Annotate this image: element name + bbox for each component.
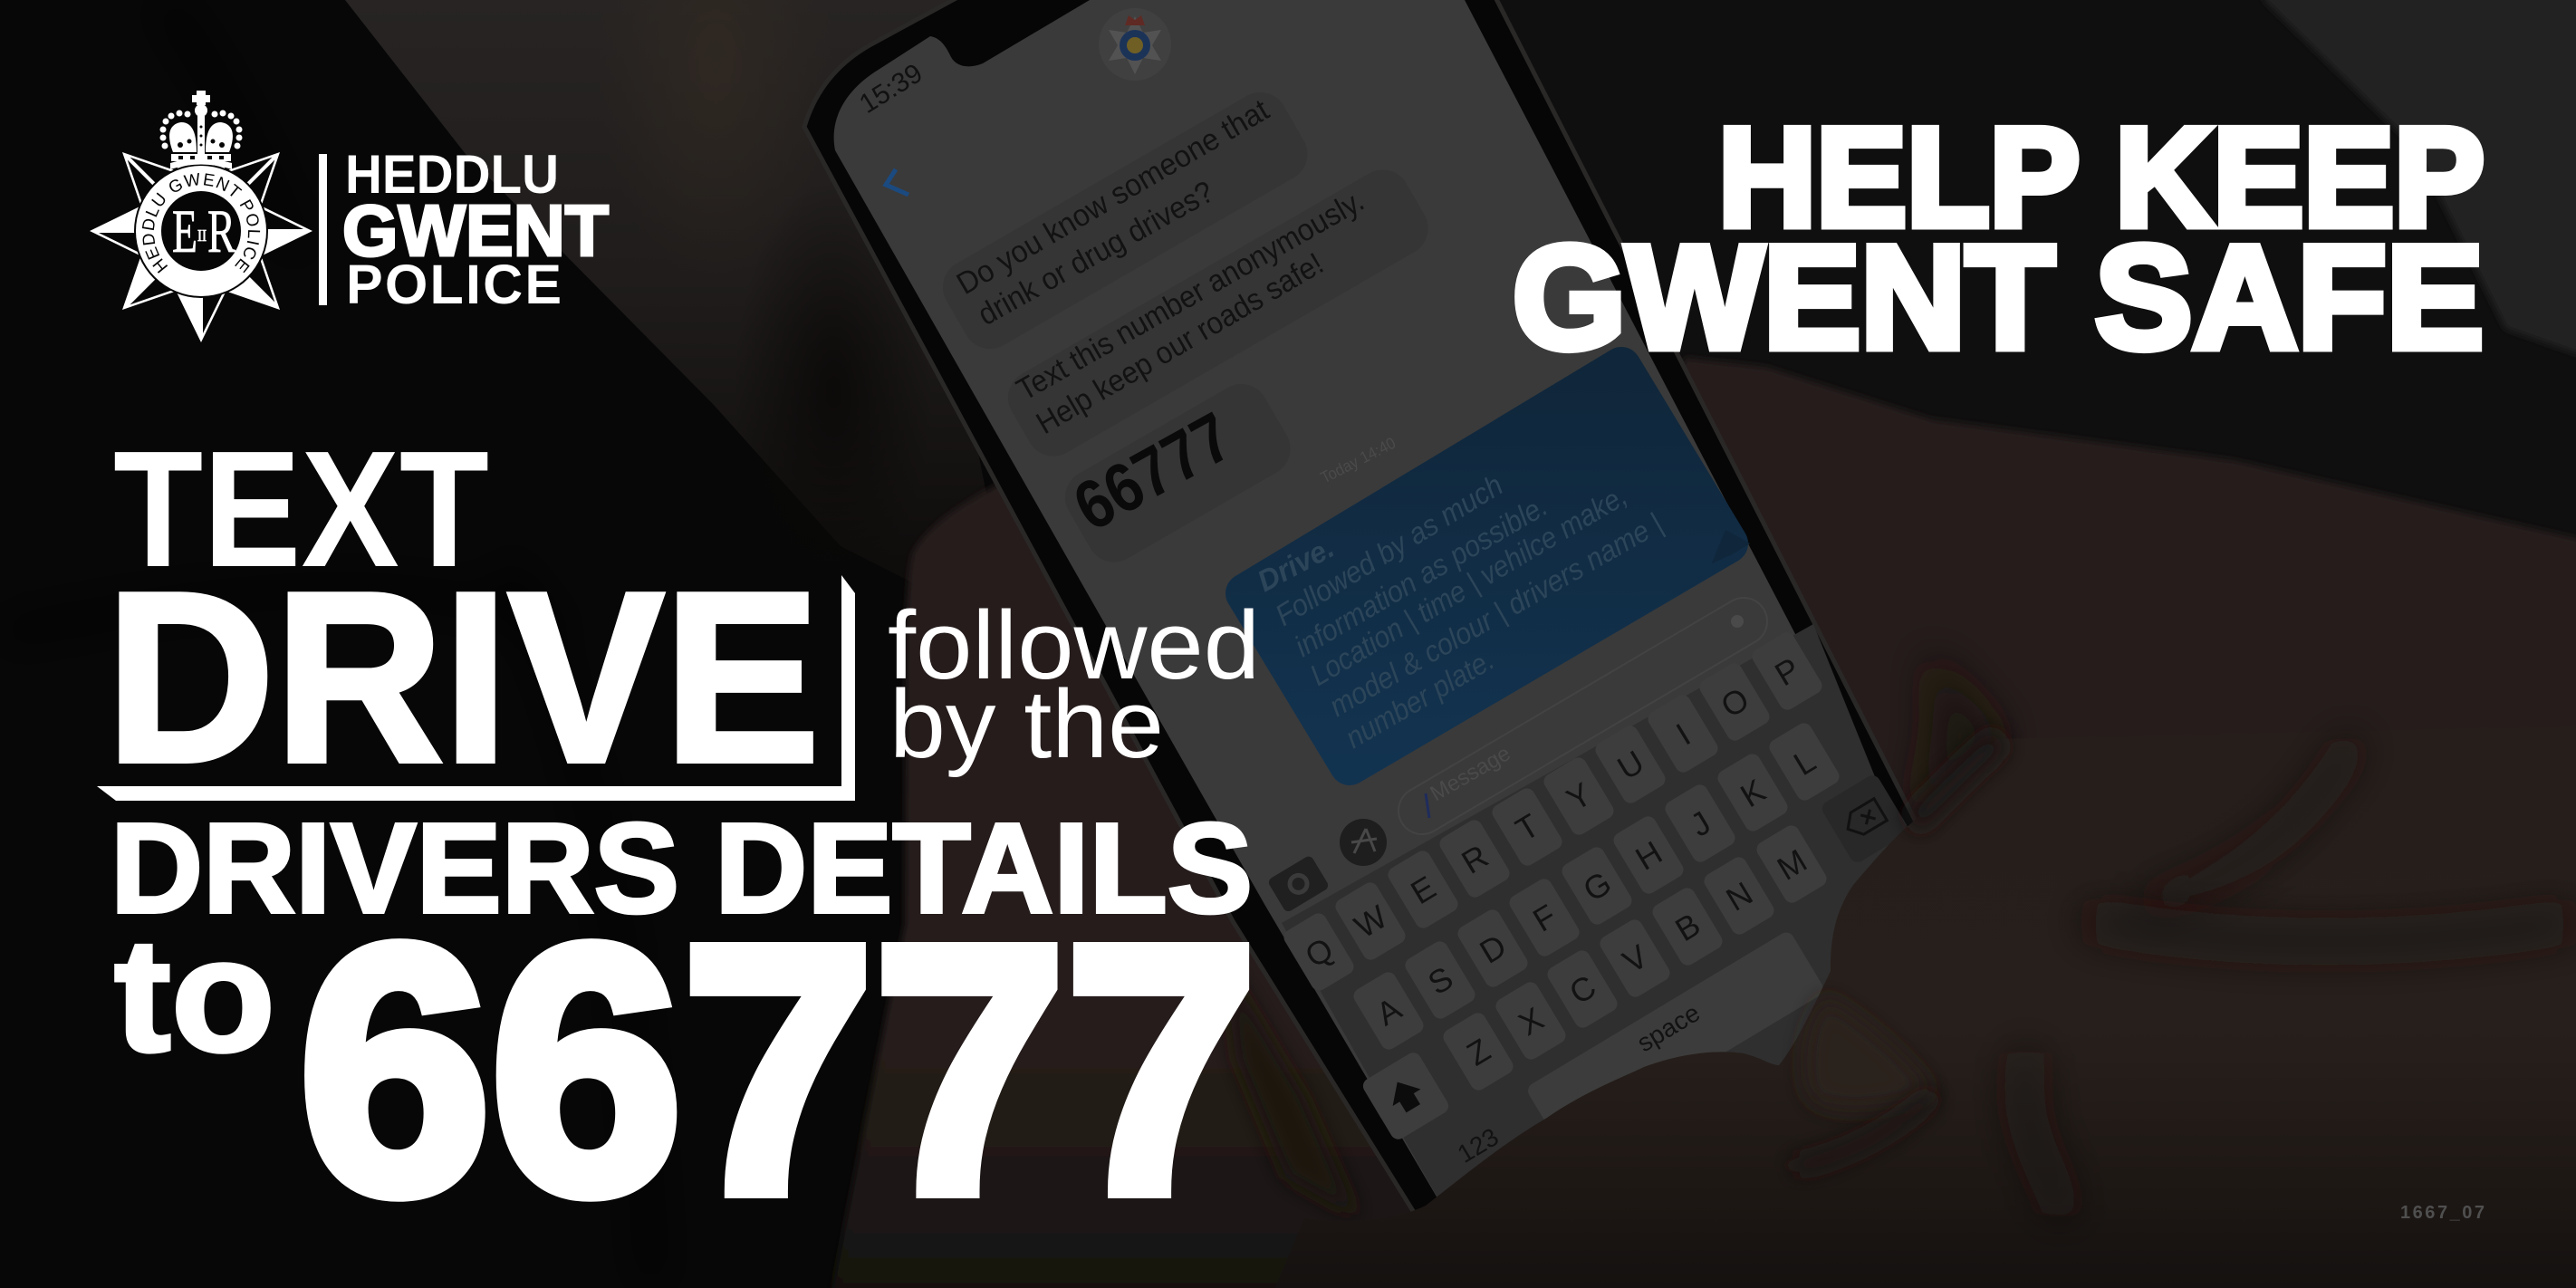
headline: help keep gwent safe	[1513, 99, 2485, 380]
keyboard keys: U	[1611, 743, 1650, 787]
keyboard keys: H	[1629, 833, 1668, 878]
keyboard keys: N	[1720, 874, 1759, 918]
to: to	[114, 905, 275, 1085]
keyboard keys: F	[1526, 897, 1562, 939]
message text 2: Text this number anonymously.	[1011, 184, 1370, 408]
message number 66777: 66777	[1062, 398, 1245, 546]
back chevron	[886, 169, 908, 195]
keyboard keys: L	[1787, 742, 1821, 783]
EIIR cypher: E	[172, 197, 197, 265]
EIIR cypher	[172, 197, 235, 265]
followed by the: by the	[889, 669, 1164, 778]
keyboard keys: W	[1348, 898, 1393, 946]
message input row	[1267, 615, 1744, 913]
blue message text	[1252, 467, 1668, 755]
logo wordmark: POLICE	[346, 254, 562, 315]
followed by the: followed	[888, 591, 1260, 699]
headline: help keep gwent safe: HELP KEEP	[1718, 99, 2485, 255]
blue message text: model & colour | drivers name |	[1323, 506, 1668, 723]
keyboard keys: 123	[1453, 1122, 1504, 1168]
star badge	[90, 120, 312, 342]
message text 1: Do you know someone that	[951, 92, 1275, 302]
hand shadow beside the phone	[1223, 648, 2006, 1218]
keyboard keys: B	[1668, 906, 1706, 948]
followed by the	[888, 591, 1260, 778]
EIIR cypher: II	[197, 226, 207, 245]
blue message text: information as possible.	[1289, 488, 1553, 663]
hands behind the phone	[829, 358, 2576, 1288]
message text 2: Help keep our roads safe!	[1031, 246, 1330, 441]
timestamp: Today 14:40	[1318, 434, 1399, 487]
phone screen	[834, 0, 1902, 1218]
message bubble 2	[998, 159, 1438, 466]
background: clothing folds	[0, 0, 652, 1288]
keyboard keys: R	[1456, 837, 1495, 881]
keyboard keys: G	[1577, 864, 1618, 908]
fingers and thumb over the phone	[1268, 725, 2576, 1288]
keyboard keys: Q	[1299, 930, 1340, 975]
background: lighter area top right	[2264, 0, 2576, 371]
logo divider	[319, 154, 327, 305]
keyboard keys: D	[1474, 927, 1513, 971]
message bubble 1	[933, 82, 1317, 359]
drivers details: DRIVERS DETAILS	[111, 796, 1253, 939]
keyboard keys: O	[1715, 680, 1755, 725]
message bubble 3	[1055, 374, 1301, 572]
keyboard keys: Z	[1460, 1031, 1496, 1073]
call to action: text: TEXT	[113, 416, 489, 601]
call to action: drive: DRIVE	[106, 542, 820, 812]
blue message text: Location | time | vehilce make,	[1304, 478, 1633, 692]
keyboard keys: M	[1771, 841, 1813, 888]
keyboard keys: C	[1563, 967, 1602, 1012]
blue message bubble	[1245, 367, 1750, 765]
finger creases	[1793, 738, 2576, 1216]
blue message text: number plate.	[1340, 642, 1500, 755]
logo wordmark	[342, 144, 609, 315]
EIIR cypher: R	[207, 197, 235, 265]
keyboard keys: V	[1616, 937, 1654, 980]
police crest logo	[90, 91, 312, 342]
drive corner bracket	[97, 575, 855, 801]
background: dark sleeve right	[1495, 0, 2576, 562]
message input row: Message	[1426, 741, 1514, 806]
keyboard keys: space	[1632, 998, 1705, 1057]
crown	[159, 91, 243, 169]
keyboard keys: P	[1768, 650, 1806, 693]
keyboard keys: A	[1370, 990, 1408, 1033]
number 66777: 66777	[299, 874, 1257, 1266]
print reference code: 1667_07	[2400, 1203, 2485, 1223]
keyboard keys: K	[1734, 772, 1772, 814]
keyboard keys: J	[1684, 803, 1717, 844]
background: blurred area top centre	[345, 0, 1014, 634]
blue message text: Drive.	[1252, 530, 1340, 598]
keyboard keys: I	[1669, 716, 1697, 753]
keyboard keys: S	[1421, 959, 1459, 1002]
keyboard keys: X	[1512, 1000, 1550, 1043]
phone frame	[804, 0, 1916, 1218]
keyboard keys	[1281, 630, 1910, 1168]
keyboard keys: Y	[1560, 775, 1598, 818]
message text 1: drink or drug drives?	[972, 175, 1219, 332]
logo wordmark: GWENT	[342, 190, 609, 271]
blue message text: Followed by as much	[1269, 467, 1508, 632]
keyboard base	[1282, 624, 1902, 1218]
logo wordmark: HEDDLU	[345, 144, 559, 205]
keyboard keys: E	[1404, 869, 1442, 911]
status bar time: 15:39	[854, 58, 928, 120]
headline: help keep gwent safe: GWENT SAFE	[1513, 216, 2484, 380]
ring lettering: HEDDLU GWENT POLICE	[141, 172, 261, 274]
keyboard keys: T	[1509, 806, 1545, 849]
contact badge	[1099, 8, 1171, 81]
